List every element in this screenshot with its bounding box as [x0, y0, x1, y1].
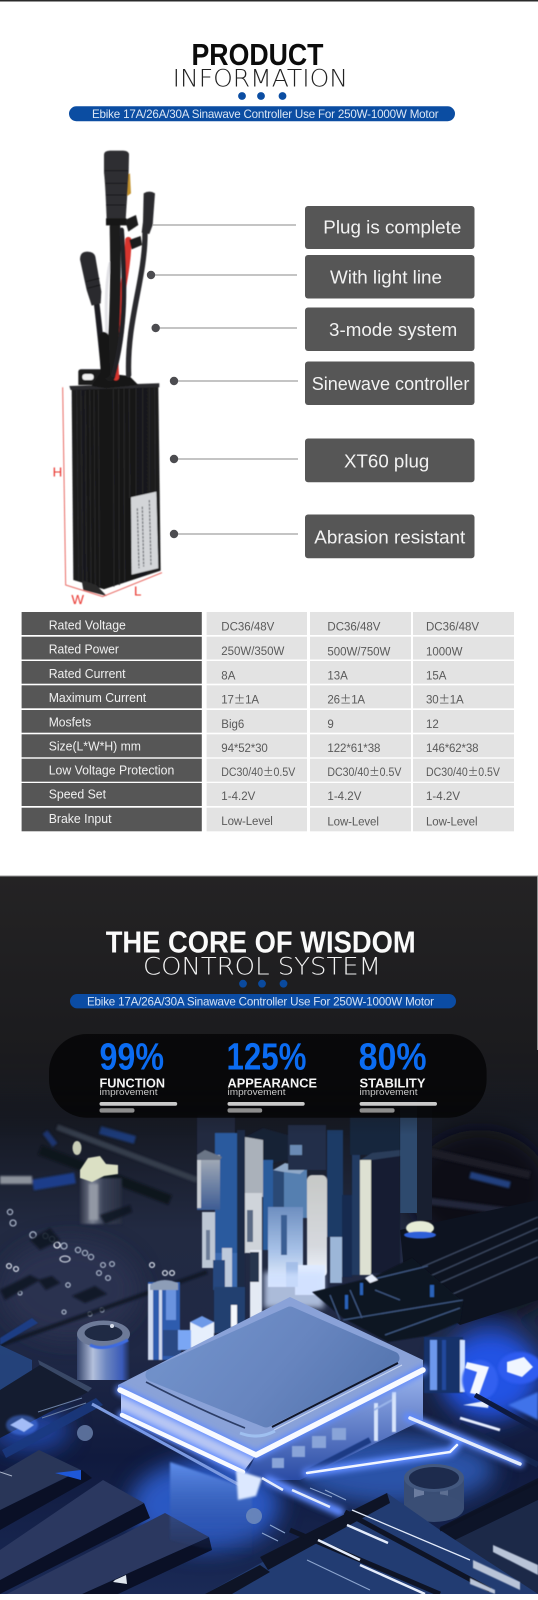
lower right circuit traces: [205, 1478, 538, 1594]
table row: maximum current: 17±1A: [221, 692, 259, 708]
stat: function: FUNCTION: [100, 1076, 165, 1091]
tower base glow: [264, 1272, 324, 1308]
table row: low voltage protection: [22, 759, 514, 782]
blurred component beads: [7, 1209, 174, 1316]
stat: stability: 80%: [359, 1036, 427, 1078]
table row: brake input: Low-Level: [426, 816, 478, 828]
callout: XT60 plug: [305, 438, 474, 482]
table row: rated current: 13A: [327, 671, 348, 683]
wires: [97, 227, 145, 377]
panel: dark control system section: [0, 876, 538, 1600]
reflection under chip: [170, 1462, 252, 1560]
stat: appearance: improvement: [228, 1087, 286, 1097]
chip base: [118, 1297, 423, 1480]
decorative dots: heading: [238, 92, 286, 100]
small left towers: [148, 1280, 245, 1360]
decorative dots: dark heading: [239, 980, 287, 988]
heading: product information: INFORMATION: [173, 65, 348, 93]
board glow zones: [0, 1130, 538, 1550]
heading: the core of wisdom: CONTROL SYSTEM: [143, 952, 381, 980]
cable gland: [92, 373, 138, 388]
table row: maximum current: [22, 685, 514, 708]
table row: rated current: Rated Current: [49, 666, 126, 681]
stat: appearance: [226, 1036, 317, 1113]
blurred dark chips: [0, 1205, 207, 1345]
chip rim highlights: [146, 1363, 402, 1436]
table row: low voltage protection: DC30/40±0.5V: [426, 764, 500, 780]
callout: 3-mode system: 3-mode system: [329, 319, 457, 340]
tower group: [197, 1115, 400, 1318]
table row: rated current: [22, 661, 514, 684]
left node and trace: [2, 1398, 103, 1458]
top edge bar: [0, 0, 538, 2]
dimension letters: [53, 465, 141, 607]
callout: plug is complete: [305, 206, 474, 249]
table row: size: Size(L*W*H) mm: [49, 738, 141, 754]
left circuit corner: [0, 1345, 92, 1438]
callout: plug is complete: Plug is complete: [323, 216, 461, 237]
table row: rated voltage: [22, 612, 514, 635]
chip top face: [152, 1313, 393, 1421]
right glowing shapes: [460, 1352, 538, 1465]
stat: stability: improvement: [360, 1087, 418, 1097]
hot spot at chip corner: [236, 1470, 262, 1500]
stats panel: [49, 1034, 487, 1118]
main connector: [104, 151, 129, 220]
table row: mosfets: Mosfets: [49, 714, 92, 729]
table row: rated power: 500W/750W: [327, 646, 391, 658]
top fade over board: [0, 1050, 538, 1135]
table row: brake input: Brake Input: [49, 811, 112, 826]
dimension lines: [63, 387, 162, 597]
table row: rated voltage: DC36/48V: [327, 622, 381, 634]
table row: rated voltage: DC36/48V: [426, 622, 479, 634]
table row: rated voltage: Rated Voltage: [49, 617, 126, 632]
table row: rated power: Rated Power: [49, 642, 120, 656]
yellow plug: [127, 173, 131, 196]
right connector: [142, 192, 155, 234]
heading: the core of wisdom: THE CORE OF WISDOM: [106, 925, 416, 960]
table row: speed set: 1-4.2V: [327, 791, 362, 803]
table row: mosfets: Big6: [221, 719, 244, 731]
blue trace left: [0, 1318, 38, 1345]
table row: rated power: 250W/350W: [221, 646, 284, 658]
table row: rated power: 1000W: [426, 646, 463, 658]
blue column behind towers: [400, 1118, 417, 1213]
table row: rated current: 8A: [221, 670, 236, 682]
chip front components: [272, 1392, 396, 1473]
silver capacitor: [77, 1320, 130, 1380]
table row: low voltage protection: Low Voltage Protection: [49, 762, 174, 778]
board base: [0, 1050, 538, 1594]
heading: the core of wisdom: [106, 925, 416, 980]
table row: low voltage protection: DC30/40±0.5V: [221, 764, 296, 780]
table row: mosfets: [22, 710, 514, 733]
subtitle pill: dark section: Ebike 17A/26A/30A Sinawave Controller Use For 250W-1000W Motor: [87, 996, 434, 1009]
table row: rated power: [22, 637, 514, 660]
table row: size: 146*62*38: [426, 743, 478, 755]
edge of trench beside chip: [92, 1404, 243, 1487]
table row: maximum current: 26±1A: [327, 692, 365, 708]
mounting bracket: [78, 369, 102, 385]
small connectors: [125, 215, 142, 249]
stat: function: 99%: [100, 1036, 164, 1078]
blurred upper-left traces: [0, 1127, 197, 1200]
right background circuitry: [400, 1200, 538, 1325]
dark block right of chip: [312, 1258, 463, 1342]
heading: product information: PRODUCT: [192, 38, 324, 72]
table row: speed set: 1-4.2V: [426, 791, 460, 803]
table row: speed set: [22, 783, 514, 806]
lower left dark blocks: [0, 1450, 212, 1594]
product photo: controller with cables: [53, 151, 162, 607]
right pillars: [424, 1337, 465, 1393]
blurred capacitor upper left: [72, 1141, 122, 1224]
dimension letters: H: [53, 465, 62, 480]
stat: appearance: 125%: [226, 1036, 306, 1078]
callout: 3-mode system: [305, 308, 474, 351]
stat: function: [100, 1036, 177, 1113]
table row: speed set: Speed Set: [49, 786, 106, 802]
upper right blurred details: [432, 1150, 530, 1212]
callout leader lines and dots: [147, 225, 298, 538]
dimension letters: L: [134, 583, 141, 598]
callout: with light line: [305, 255, 474, 298]
table row: maximum current: 30±1A: [426, 692, 464, 708]
callout: abrasion resistant: Abrasion resistant: [314, 526, 465, 547]
dimension letters: W: [71, 592, 84, 607]
table row: rated voltage: DC36/48V: [221, 622, 275, 634]
table row: brake input: Low-Level: [221, 816, 273, 828]
white strip under board: [0, 1594, 538, 1600]
cream blob right: [404, 1221, 436, 1238]
subtitle pill: product: Ebike 17A/26A/30A Sinawave Controller Use For 250W-1000W Motor: [92, 108, 439, 121]
callout: sinewave controller: [305, 362, 474, 405]
heading: product information: [173, 38, 348, 93]
stat: appearance: APPEARANCE: [228, 1076, 317, 1091]
table row: mosfets: 12: [426, 719, 439, 731]
table row: mosfets: 9: [327, 719, 334, 731]
table row: maximum current: Maximum Current: [49, 690, 147, 705]
callout: with light line: With light line: [330, 266, 442, 287]
stat: stability: STABILITY: [360, 1076, 426, 1091]
callout: XT60 plug: XT60 plug: [344, 451, 429, 472]
stat: function: improvement: [100, 1087, 158, 1097]
callout: sinewave controller: Sinewave controller: [312, 373, 469, 394]
table row: rated current: 15A: [426, 671, 447, 683]
table row: brake input: [22, 808, 514, 831]
table row: size: 122*61*38: [327, 743, 380, 755]
rating label: [131, 492, 158, 575]
specification table: [22, 612, 514, 831]
illustration: glowing circuit board chip: [0, 1050, 538, 1594]
controller body: [69, 383, 161, 596]
neon glow lines: [120, 1370, 520, 1512]
table row: speed set: 1-4.2V: [221, 791, 256, 803]
table row: low voltage protection: DC30/40±0.5V: [327, 764, 402, 780]
table row: brake input: Low-Level: [327, 816, 379, 828]
coin cell: [404, 1464, 464, 1522]
callout: abrasion resistant: [305, 514, 474, 558]
table row: size: [22, 734, 514, 757]
stat: stability: [359, 1036, 437, 1113]
left connector: [80, 252, 101, 306]
table row: size: 94*52*30: [221, 743, 268, 755]
